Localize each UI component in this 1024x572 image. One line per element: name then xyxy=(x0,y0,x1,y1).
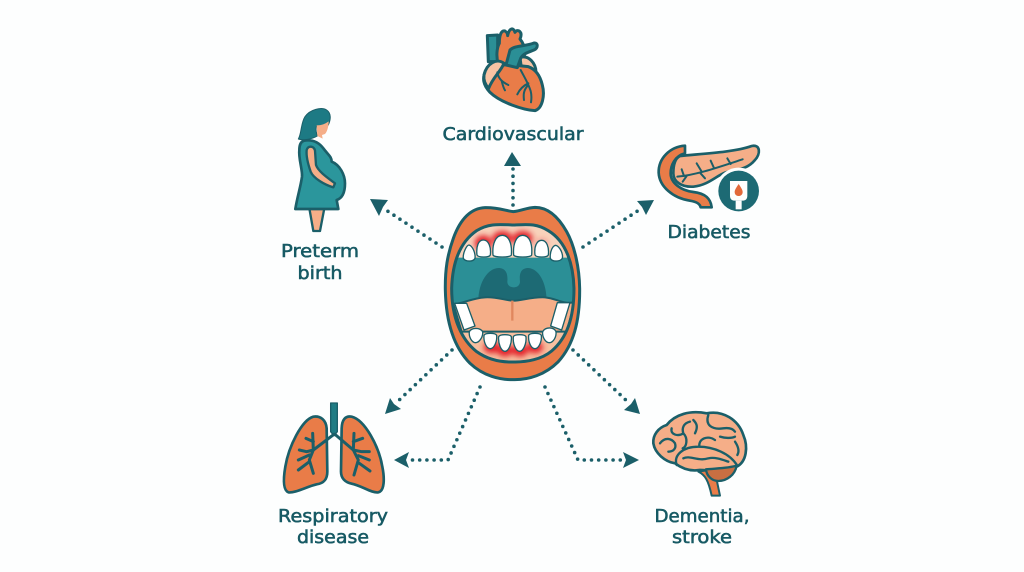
icon: pancreas with glucose meter xyxy=(659,146,762,214)
bronchi xyxy=(298,433,370,475)
lower teeth xyxy=(455,303,570,351)
pulmonary artery xyxy=(506,43,537,68)
cerebrum xyxy=(653,412,746,471)
left atrium xyxy=(484,61,504,88)
upper teeth xyxy=(463,235,562,261)
folds xyxy=(660,415,738,466)
dress xyxy=(295,140,345,209)
label: Diabetes: Diabetes xyxy=(668,223,750,243)
brain stem xyxy=(698,470,720,496)
mouth interior xyxy=(452,225,574,362)
arrow: mouth to respiratory disease, diagonal xyxy=(385,350,452,414)
test strip xyxy=(730,181,747,201)
tongue centre line xyxy=(511,300,514,321)
inflamed upper gums xyxy=(475,231,548,251)
pancreatic duct xyxy=(677,158,743,182)
duodenum xyxy=(659,146,712,207)
coronary vessels xyxy=(497,70,531,102)
face xyxy=(317,121,329,139)
blood drop xyxy=(735,184,743,196)
icon: lungs xyxy=(284,403,384,492)
label: Dementia, stroke: Dementia, xyxy=(654,507,750,527)
soft palate and uvula xyxy=(478,268,547,302)
arrow: mouth to dementia, diagonal xyxy=(573,350,640,414)
label: Respiratory disease: Respiratory xyxy=(278,507,388,527)
trachea xyxy=(331,403,337,436)
hair xyxy=(298,109,330,140)
label: Dementia, stroke: stroke xyxy=(672,528,732,548)
left lung xyxy=(284,417,327,492)
label: Preterm birth: Preterm xyxy=(281,242,359,262)
arrow: mouth to respiratory disease, elbow xyxy=(394,387,480,468)
right atrium xyxy=(520,57,536,72)
icon: heart xyxy=(484,29,543,111)
ventricles xyxy=(484,64,543,111)
aorta xyxy=(497,29,525,65)
icon: pregnant woman xyxy=(295,109,345,231)
label: Respiratory disease: disease xyxy=(297,528,369,548)
right lung xyxy=(341,417,384,492)
label: Dementia, stroke xyxy=(654,507,750,548)
lips xyxy=(445,207,580,380)
arrow: mouth to cardiovascular xyxy=(504,152,521,205)
icon: brain xyxy=(653,412,746,496)
label: Preterm birth: birth xyxy=(298,264,342,284)
arrow: mouth to diabetes xyxy=(583,200,654,247)
central open mouth illustration xyxy=(445,207,580,380)
inflamed lower gums xyxy=(484,341,543,357)
label: Respiratory disease xyxy=(278,507,388,548)
tongue xyxy=(453,297,575,332)
lower jaw gum xyxy=(463,332,564,360)
vena cava xyxy=(487,35,498,62)
meter badge xyxy=(715,168,762,214)
legs xyxy=(309,208,324,231)
label: Preterm birth xyxy=(281,242,359,284)
pancreas body xyxy=(673,146,759,187)
throat xyxy=(450,258,577,303)
label: Cardiovascular: Cardiovascular xyxy=(442,125,584,145)
arrow: mouth to preterm birth xyxy=(370,199,442,247)
cerebellum xyxy=(706,466,737,481)
arrow: mouth to dementia, elbow xyxy=(545,387,639,468)
arm xyxy=(307,147,335,187)
